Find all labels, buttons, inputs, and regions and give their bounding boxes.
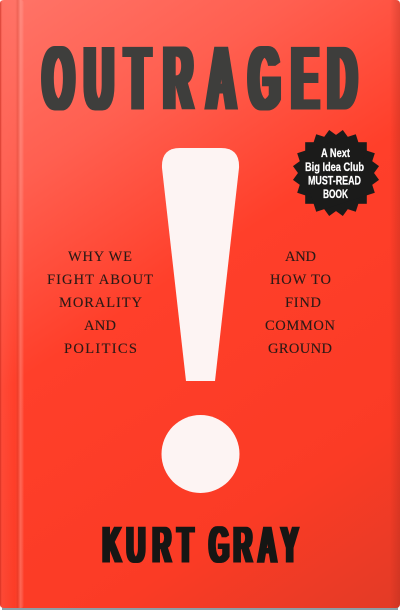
title: OUTRAGED: OUTRAGED (43, 27, 357, 129)
subtitle: right column: AND (285, 249, 316, 265)
exclamation bar (162, 148, 239, 381)
badge text: BOOK (323, 187, 348, 201)
subtitle: left column: WHY WE (68, 249, 132, 265)
subtitle: left column: POLITICS (64, 341, 137, 357)
author: KURT GRAY: KURT GRAY (102, 516, 298, 574)
subtitle: left column: AND (84, 318, 116, 334)
subtitle: right column: FIND (285, 295, 321, 311)
subtitle: right column: HOW TO (270, 272, 331, 288)
badge: must-read book (293, 130, 379, 216)
badge starburst (293, 130, 379, 216)
subtitle: left column: MORALITY (59, 295, 143, 311)
subtitle: left column: FIGHT ABOUT (47, 272, 153, 288)
icon: exclamation mark (162, 148, 240, 493)
shadow line below book (2, 606, 398, 610)
subtitle: right column (265, 249, 336, 357)
badge text: MUST-READ (308, 174, 361, 188)
subtitle: right column: COMMON (265, 318, 336, 334)
badge text: A Next (321, 146, 350, 160)
subtitle: right column: GROUND (268, 341, 332, 357)
badge text (305, 146, 364, 201)
exclamation dot (162, 415, 240, 493)
badge text: Big Idea Club (305, 160, 364, 174)
subtitle: left column (47, 249, 153, 357)
